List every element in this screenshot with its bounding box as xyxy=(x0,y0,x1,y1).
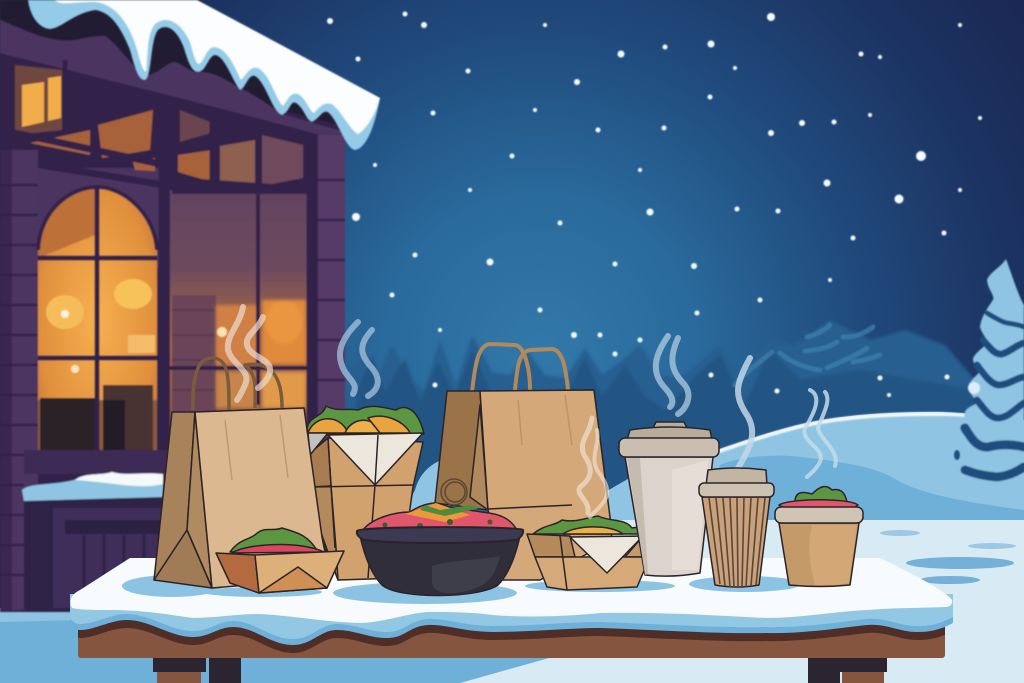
arched window glow xyxy=(38,187,157,450)
roof snow xyxy=(28,0,380,150)
building xyxy=(0,0,345,612)
wood shadow under snow xyxy=(78,620,945,653)
table snow top xyxy=(70,558,952,623)
small tray front left xyxy=(216,528,344,593)
box with wrap and tacos xyxy=(307,406,424,580)
table xyxy=(70,558,953,683)
table legs xyxy=(153,656,887,683)
steam in front of items xyxy=(228,307,607,517)
snowy pine tree on right xyxy=(954,259,1024,500)
upper window panes xyxy=(15,65,303,186)
table top wood xyxy=(78,620,945,658)
falling snow stars xyxy=(327,12,982,397)
lower cabinet xyxy=(24,498,164,612)
snowy ground xyxy=(0,520,1024,683)
large right window xyxy=(170,190,308,452)
food items xyxy=(154,344,863,596)
tray with wrap xyxy=(527,516,657,590)
tall cup xyxy=(619,422,719,576)
snow hill xyxy=(400,412,1024,525)
brick columns xyxy=(0,135,345,610)
treeline brush highlights xyxy=(735,325,880,385)
window mullions xyxy=(10,60,312,452)
eave xyxy=(0,20,345,142)
distant pine treeline xyxy=(345,320,975,500)
black bowl with food xyxy=(357,503,523,596)
dark gable xyxy=(0,0,340,125)
building wall xyxy=(0,0,345,612)
table snow mid band xyxy=(70,594,953,639)
ribbed cup xyxy=(699,468,774,588)
small bag xyxy=(154,358,330,588)
item shadows xyxy=(122,575,801,604)
snow on sill xyxy=(22,472,163,501)
steam behind items xyxy=(340,322,836,477)
large bag xyxy=(435,344,612,580)
table snow dark edge xyxy=(70,600,953,645)
window sill xyxy=(24,450,169,474)
soup cup with salad xyxy=(775,487,863,586)
